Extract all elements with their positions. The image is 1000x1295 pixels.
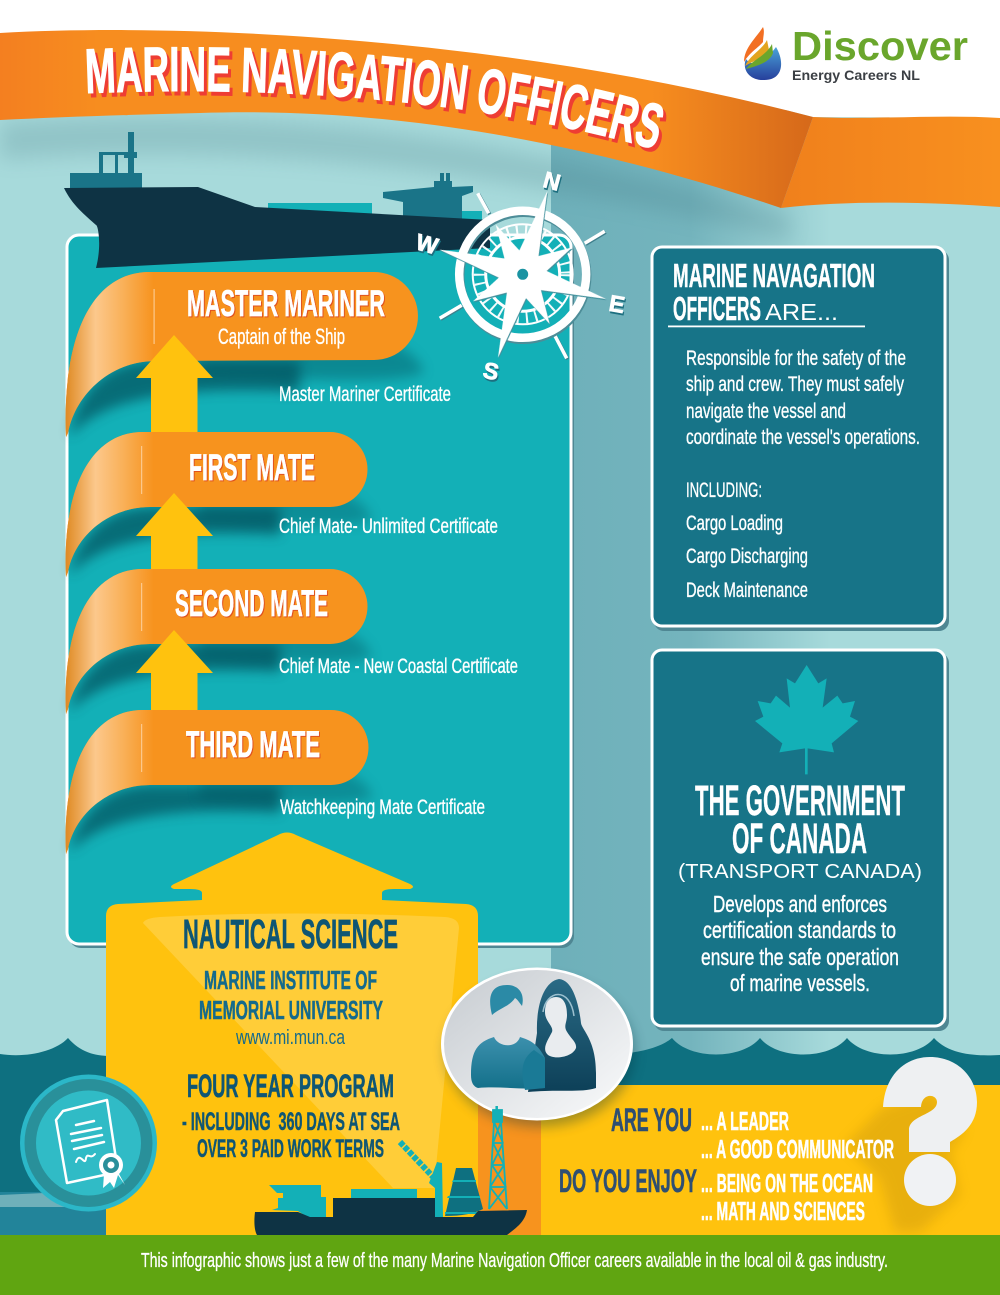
body text: navigate the vessel and [686,400,846,423]
heading: MASTER MARINER [187,283,385,324]
compass letters: N [541,166,563,196]
icon: energy drop [744,27,781,80]
derrick [489,1106,507,1209]
icon: question mark [845,1057,977,1232]
certificate label: Watchkeeping Mate Certificate [280,796,485,819]
heading: SECOND MATE [175,583,328,624]
heading: (TRANSPORT CANADA) [678,861,922,883]
body text: Develops and enforces [713,891,887,917]
institute: MARINE INSTITUTE OF [204,965,377,995]
compass letters: W [413,229,441,259]
certificate label: Chief Mate - New Coastal Certificate [279,655,518,678]
white header area [0,0,1000,118]
institute [199,965,383,1025]
heading: OF CANADA [732,815,867,863]
woman [528,979,596,1092]
program details: - INCLUDING 360 DAYS AT SEA [182,1108,400,1136]
icon: compass rose [413,166,631,385]
body text [701,891,899,996]
heading: FIRST MATE [189,447,315,488]
arrow [136,630,213,712]
do you enjoy: DO YOU ENJOY [559,1163,697,1199]
body text: of marine vessels. [730,970,870,996]
body text: Cargo Loading [686,512,783,535]
first mate ribbon [66,432,372,577]
heading: OFFICERS [673,290,761,327]
answers [701,1106,894,1226]
icon: people in disc [441,968,635,1127]
icon: certificate badge [20,1074,157,1212]
body text [686,347,920,602]
compass letters: S [481,357,501,385]
icon: small ship and rig [254,1106,527,1235]
arrow [136,493,213,571]
body text: Responsible for the safety of the [686,347,906,370]
question prompts [559,1102,894,1226]
body text: certification standards to [703,917,896,943]
body text: ship and crew. They must safely [686,373,904,396]
certificate label: Master Mariner Certificate [279,383,451,406]
footer [0,1235,1000,1295]
wordmark: Discover [792,23,968,69]
master mariner ribbon [66,272,424,437]
icon: maple leaf [755,665,858,774]
body text: Deck Maintenance [686,579,808,602]
waves and lower bands [0,1038,1000,1240]
man [490,985,523,1015]
heading: THIRD MATE [186,724,320,765]
body text: INCLUDING: [686,479,762,502]
are you: ARE YOU [611,1102,692,1138]
heading: NAUTICAL SCIENCE [183,911,398,957]
heading [668,257,875,327]
logo: Energy Careers NL [792,68,920,83]
body text: coordinate the vessel's operations. [686,426,920,449]
institute: MEMORIAL UNIVERSITY [199,995,383,1025]
compass letters [413,166,627,385]
third mate ribbon [66,710,373,854]
logo [744,23,968,83]
crane [400,1142,436,1180]
body text: Cargo Discharging [686,545,808,568]
heading: ARE... [765,299,838,325]
second mate ribbon [66,569,372,714]
program heading: FOUR YEAR PROGRAM [187,1068,394,1104]
program details [182,1108,400,1163]
program details: OVER 3 PAID WORK TERMS [197,1135,384,1163]
answers: ... A LEADER [701,1106,789,1136]
title banner [0,30,1000,208]
subheading: Captain of the Ship [218,324,345,349]
title: MARINE NAVIGATION OFFICERS [86,46,666,152]
certificate label: Chief Mate- Unlimited Certificate [279,515,498,538]
icon: tanker ship [64,132,490,268]
body text: ensure the safe operation [701,944,899,970]
panel: nautical science [106,832,478,1235]
compass letters: E [607,290,627,318]
website: www.mi.mun.ca [235,1027,346,1049]
arrow [136,335,213,434]
panel: government of canada [652,650,949,1031]
heading [678,777,922,883]
panel: officer duties [652,247,949,631]
panel: career ladder [66,235,574,948]
answers: ... MATH AND SCIENCES [701,1196,865,1226]
